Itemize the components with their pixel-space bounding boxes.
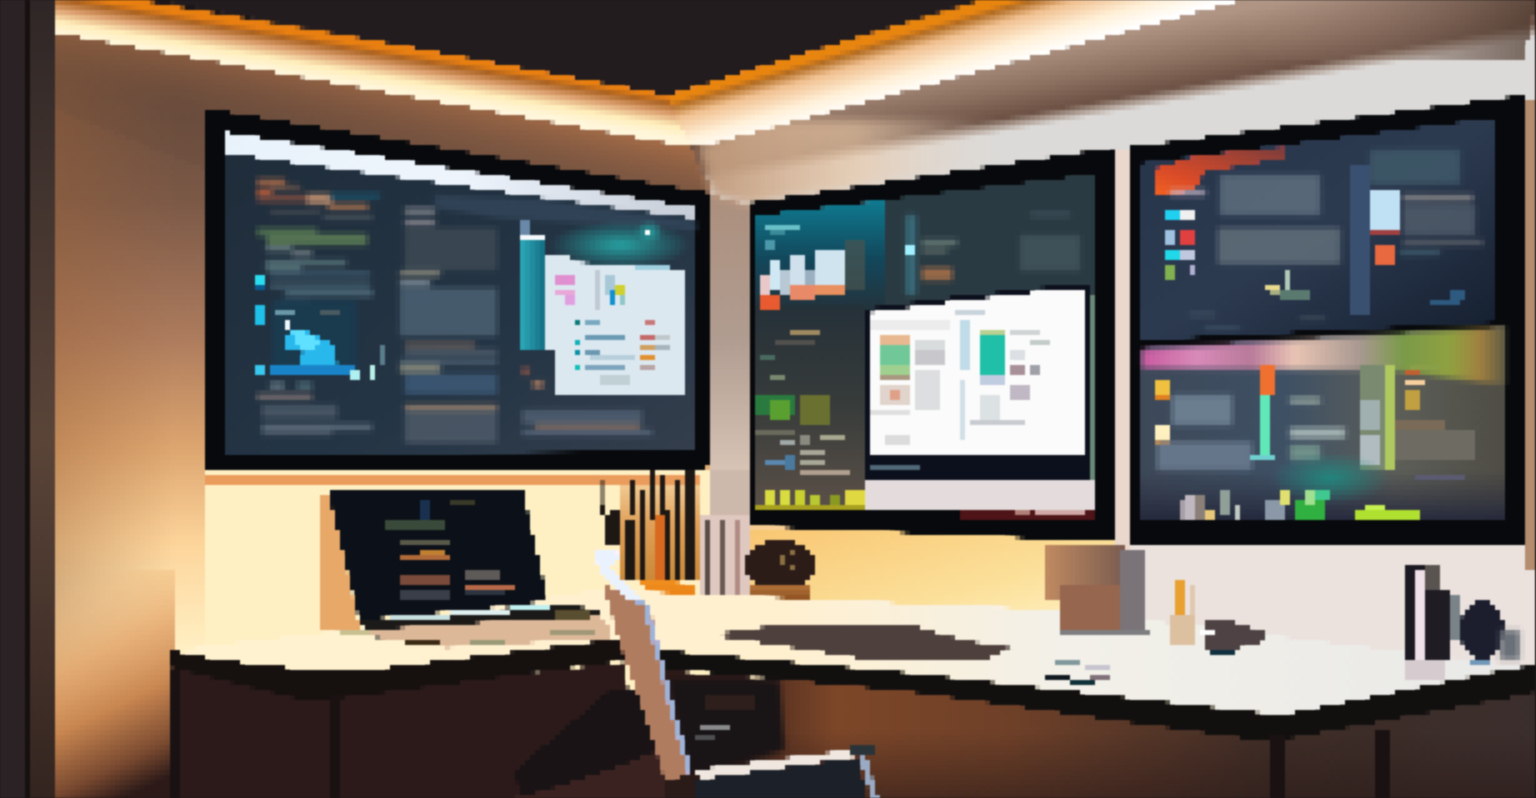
chair seat [694,750,855,780]
monitor 1 mountain chart [257,310,385,379]
monitor 3 small bar glyph [1264,270,1308,299]
soffit and upper right wall [700,0,1536,205]
laptop olive details [340,610,595,645]
monitor 3 pink header band [1142,327,1505,385]
left desk underside [169,662,640,798]
mug lower [1060,585,1125,630]
chair base shadow [515,730,665,798]
orange brush [654,516,664,580]
office chair [515,548,878,798]
mug grey side [1122,552,1146,628]
orange cup [636,578,697,605]
monitor 2 dark info bar [870,295,1093,480]
monitor 3 right lower column [1362,363,1477,481]
laptop palm rest [335,615,610,648]
laptop [318,491,610,648]
monitor 2 pale panel [864,481,1095,512]
clay pot [750,583,812,607]
left desk edge [169,638,630,702]
ceiling light strip right [668,0,1242,147]
monitor 2 white window [864,285,1092,480]
monitor 2 [748,147,1116,542]
chair arm cap [848,746,876,755]
monitor 2 left text and chips [753,329,848,475]
chair back fabric [602,583,690,780]
mouse [1200,618,1264,655]
laptop screen content [385,498,516,602]
table legs [170,670,1388,798]
laptop screen highlights [360,604,550,622]
leaf highlights [778,552,795,568]
right desk underside [660,670,1536,798]
monitor 1 [205,108,711,485]
monitor 2 bright bar segment [906,245,916,255]
monitor 2 frame [748,147,1116,542]
round speaker [1460,600,1520,665]
monitor 3 upper text blocks [1170,150,1483,330]
monitor 3 skyline with green chips [1178,490,1419,520]
mug upper [1044,545,1124,600]
desk surface [175,590,1536,715]
monitor 1 lower left text [257,383,372,435]
chair arm [858,752,878,798]
monitor 2 skyline graphic [758,225,865,311]
monitor 3 lower screen shade [1142,470,1505,521]
keyboard [708,625,1013,662]
brushes [600,470,693,580]
pencil cup [1172,578,1197,643]
chair headrest highlight [594,548,640,602]
chair lower frame [670,680,785,775]
monitor 3 [1131,95,1524,547]
monitor 2 top text [906,212,1080,295]
monitor 1 title bar [225,132,697,219]
chair dark support [515,690,672,798]
striped vase [692,470,752,603]
monitor 2 teal header [753,200,887,315]
monitor 3 teal bottom reflection [1330,543,1520,547]
mug on desk [1044,545,1150,636]
monitor 3 colour swatches [1167,209,1197,282]
monitor 3 frame [1131,95,1524,543]
monitor 1 blue header stripe [435,195,697,230]
monitor 2 left column [753,305,865,512]
monitor 2 yellow bars [753,491,864,512]
laptop screen [328,491,548,620]
pencil holder with brushes [600,470,698,605]
underside bottom fade [660,730,1536,798]
chair seat underside [694,757,865,798]
laptop lid edge [318,495,358,632]
plant in pot [745,540,815,607]
chair back rim [600,565,690,772]
monitor 3 lower text blocks [1157,395,1345,470]
ceiling light strip left [56,0,700,147]
dark ceiling panel [157,0,978,95]
monitor 1 screen [225,133,697,455]
small desk clutter [1044,660,1110,684]
monitor 1 white window [543,256,686,393]
chair frame details [695,696,755,741]
left dark door frame [0,0,56,798]
right desk edge [660,650,1536,742]
monitor 1 lower right text [522,368,652,435]
monitor 2 screen top [753,174,1095,315]
monitor 3 lower screen [1142,327,1505,521]
monitor 2 bottom red glow [960,512,1095,520]
brush backdrop [622,486,698,582]
laptop keyboard deck [358,603,605,640]
mug base [1058,628,1150,636]
monitor 3 lower left markers [1157,378,1172,445]
monitor 1 left column [257,179,380,305]
monitor 3 teal vertical bar [1252,367,1276,461]
monitor 1 cyan markers [257,276,267,327]
monitor 3 green glow [1270,452,1390,504]
speaker [1403,563,1460,680]
foliage [745,540,815,590]
monitor 3 right column [1352,165,1465,315]
monitor 3 upper screen [1142,118,1494,340]
monitor 1 mountain chart background [272,300,357,372]
monitor 3 orange corner [1157,147,1285,195]
monitor 1 teal side panel [522,220,546,352]
monitor 1 frame [205,108,711,472]
monitor 1 middle column [400,208,497,443]
monitor 1 top glow [550,220,690,269]
monitor 1 orange underglow [205,473,700,485]
